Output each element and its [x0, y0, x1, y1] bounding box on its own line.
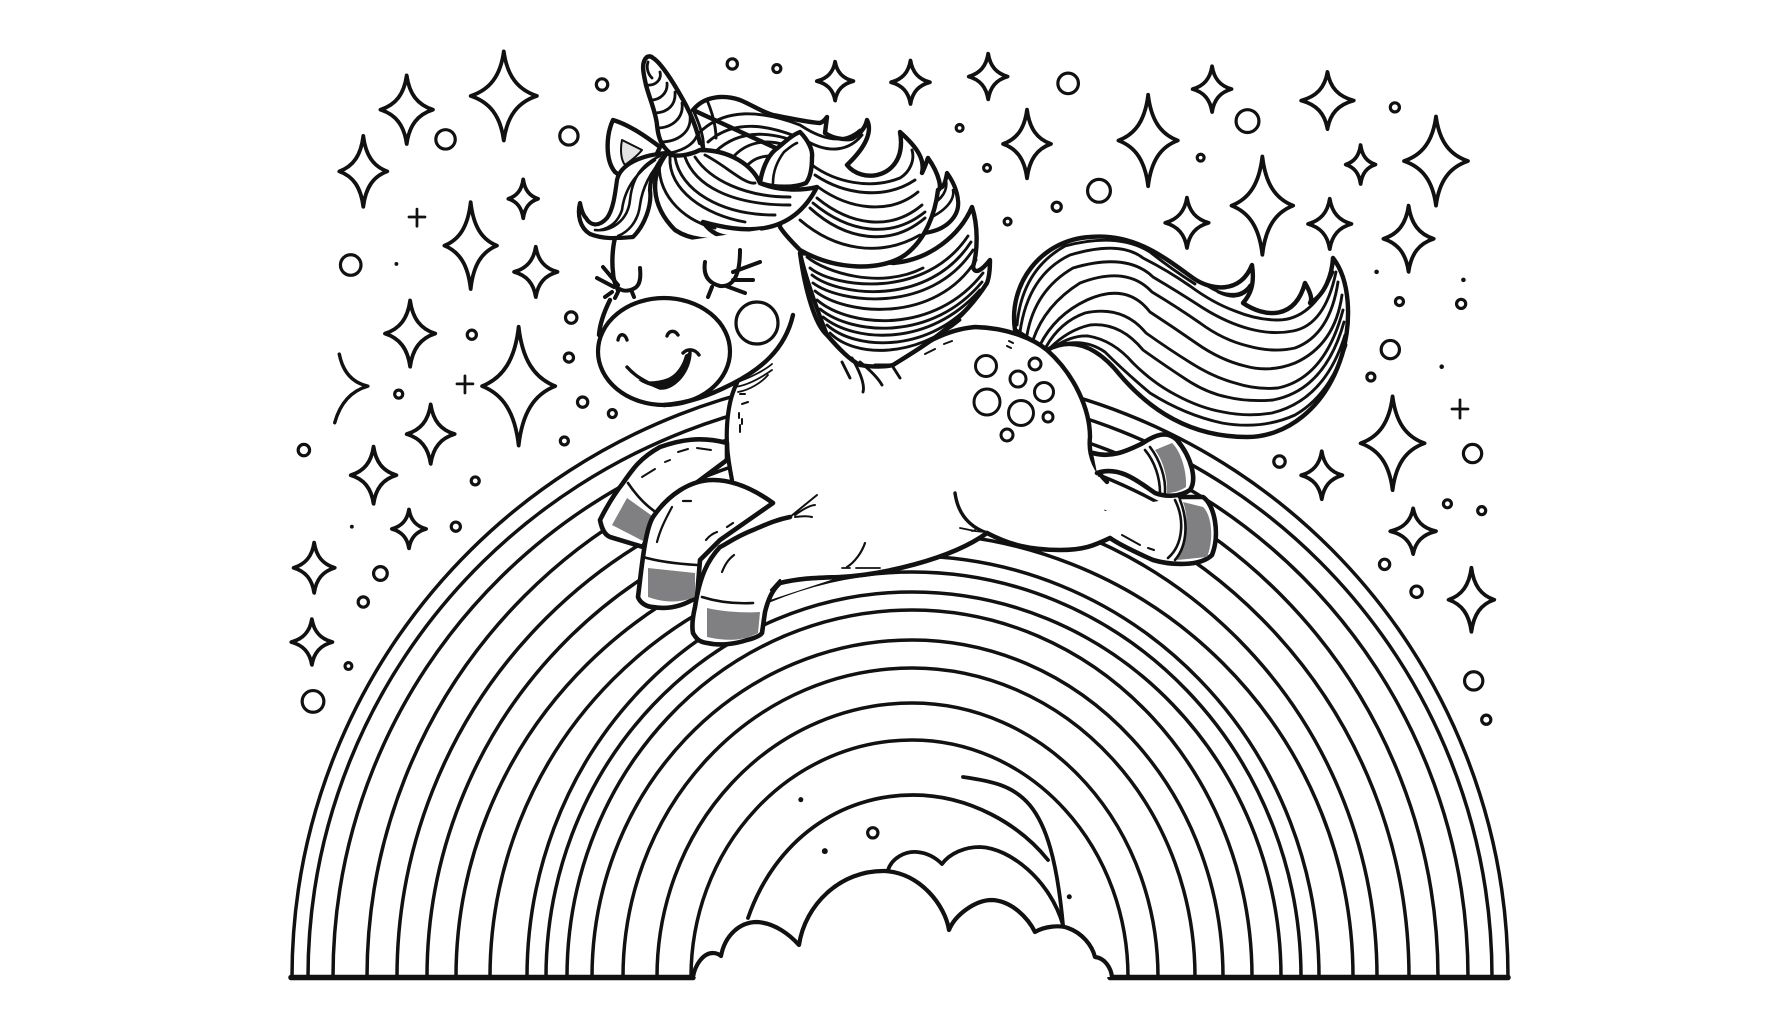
- jaw line: [664, 315, 793, 405]
- tail: [1014, 237, 1348, 437]
- spots on the rump: [974, 356, 1054, 441]
- left closed eye: [597, 267, 640, 298]
- rainbow arcs: [291, 372, 1508, 978]
- unicorn: [579, 56, 1348, 644]
- middle mane lobe: [915, 173, 958, 235]
- main forelock sweep: [655, 150, 817, 240]
- tiny dots: [350, 262, 1466, 899]
- front legs: [600, 439, 987, 644]
- crescent sparkle: [335, 354, 368, 423]
- plus signs: [409, 209, 1468, 418]
- head: [597, 230, 827, 405]
- lower mane lobe: [800, 207, 990, 366]
- mane: [579, 56, 990, 392]
- nostrils: [618, 331, 678, 340]
- smiling mouth: [638, 352, 690, 387]
- hind legs: [987, 434, 1216, 564]
- upper mane lobe: [693, 97, 940, 266]
- cheek: [736, 302, 778, 344]
- right closed eye: [705, 250, 760, 297]
- left ear: [608, 120, 660, 190]
- small circles: [298, 59, 1491, 838]
- four-point stars: [291, 51, 1494, 665]
- neck fur: [735, 364, 772, 392]
- sparkles, dots and plus signs in the sky: [291, 51, 1494, 899]
- muzzle: [598, 298, 730, 405]
- horn: [643, 56, 703, 159]
- right ear: [760, 132, 812, 187]
- cloud under the rainbow: [693, 847, 1112, 977]
- body: [700, 253, 1110, 600]
- face outline: [599, 238, 618, 335]
- forelock left curl: [579, 153, 667, 238]
